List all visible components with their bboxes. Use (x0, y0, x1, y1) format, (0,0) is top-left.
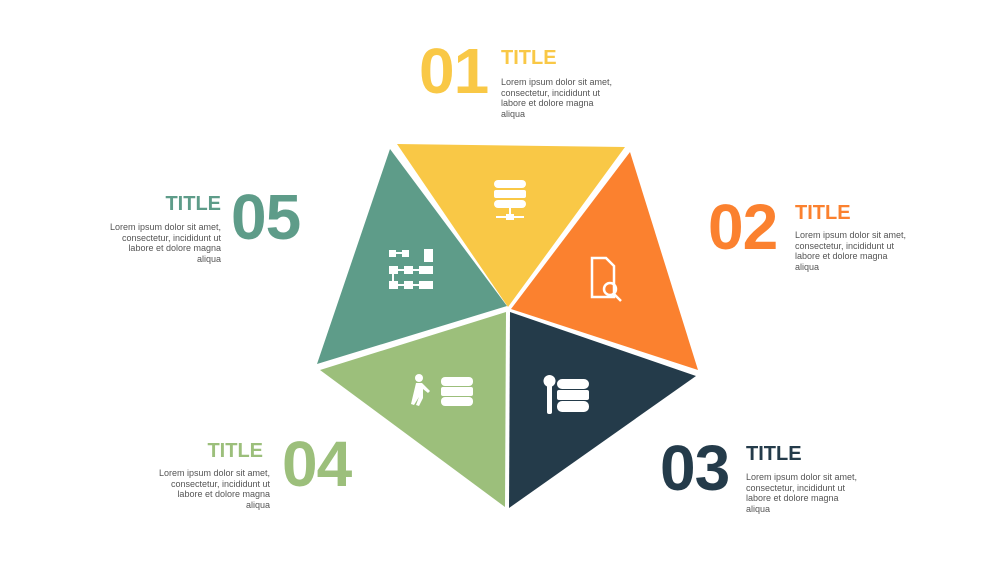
icon: flowchart (389, 249, 433, 289)
block 04 (159, 428, 352, 510)
segment 03 navy (509, 312, 696, 508)
segment 04 light green (320, 312, 506, 507)
text 03: Lorem ipsum dolor sit amet, consectetur, incididunt ut labore et dolore magna aliqua (746, 472, 857, 514)
icon: wrench database (544, 375, 589, 414)
segment 02 orange (511, 152, 698, 370)
text 04: Lorem ipsum dolor sit amet, consectetur, incididunt ut labore et dolore magna aliqua (159, 468, 270, 510)
block 03 (660, 432, 857, 514)
text 02: Lorem ipsum dolor sit amet, consectetur, incididunt ut labore et dolore magna aliqua (795, 230, 906, 272)
icon: database network (494, 180, 526, 220)
number 02: 02 (708, 191, 777, 263)
title 02: TITLE (795, 202, 851, 224)
number 01: 01 (419, 35, 488, 107)
title 03: TITLE (746, 443, 802, 465)
block 01 (419, 35, 612, 119)
number 04: 04 (282, 428, 351, 500)
icon: miner database (411, 374, 473, 406)
number 03: 03 (660, 432, 729, 504)
text 01: Lorem ipsum dolor sit amet, consectetur, incididunt ut labore et dolore magna aliqua (501, 77, 612, 118)
number 05: 05 (231, 181, 300, 253)
icon: document search (592, 258, 621, 301)
segment 01 yellow (397, 144, 625, 307)
title 04: TITLE (207, 440, 263, 462)
text 05: Lorem ipsum dolor sit amet, consectetur, incididunt ut labore et dolore magna aliqua (110, 222, 221, 264)
title 01: TITLE (501, 47, 557, 69)
block 02 (708, 191, 906, 272)
segment 05 teal (317, 149, 507, 364)
title 05: TITLE (165, 193, 221, 215)
block 05 (110, 181, 300, 264)
